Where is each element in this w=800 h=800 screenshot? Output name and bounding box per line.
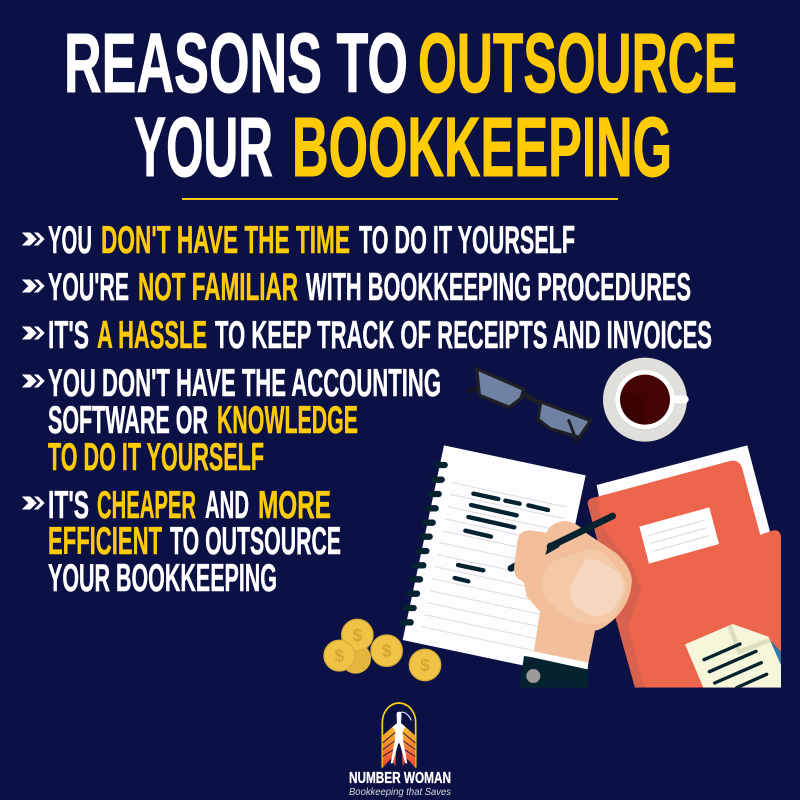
reason 4: TO DO IT YOURSELF [48,436,264,479]
panel: red folder [588,445,781,688]
reason 2: NOT FAMILIAR [138,266,298,309]
reason 3: A HASSLE [97,314,207,357]
reason 4 [23,362,441,479]
title: YOUR [134,100,273,194]
reason 3: IT'S [48,314,89,357]
reason 1: YOU [48,219,92,262]
reason 5: TO OUTSOURCE [170,520,341,563]
icon: gold coins [324,619,441,681]
panel: spiral notebook [403,445,586,670]
reason 4: YOU DON'T HAVE THE ACCOUNTING [48,362,441,405]
reason 5 [23,484,341,600]
reason 5: IT'S [48,484,89,527]
title: REASONS TO [64,16,408,110]
reason 4: KNOWLEDGE [217,399,358,442]
reason 5: CHEAPER [97,484,196,527]
folder label [639,507,719,564]
reason 2 [23,266,691,309]
reason 5: YOUR BOOKKEEPING [48,557,277,600]
icon: hand holding pen [511,516,632,688]
reason 1: TO DO IT YOURSELF [359,219,575,262]
shirt cuff [519,656,588,688]
reasons list [23,219,712,600]
logo tagline: Bookkeeping that Saves [349,786,452,798]
logo emblem [382,703,416,768]
handwritten lines [455,494,548,581]
paper note [685,624,781,688]
logo name: NUMBER WOMAN [349,770,451,787]
reason 4: SOFTWARE OR [48,399,208,442]
reason 2: YOU'RE [48,266,129,309]
reason 3 [23,314,712,357]
icon: gold coins: $ [382,641,392,661]
reason 5: MORE [258,484,331,527]
reason 5: AND [205,484,249,527]
reason 1: DON'T HAVE THE TIME [101,219,350,262]
logo: Number Woman [349,703,452,798]
icon: gold coins: $ [420,655,430,675]
reason 5: EFFICIENT [48,520,162,563]
icon: gold coins: $ [335,646,345,666]
title [64,16,737,194]
icon: coffee cup [603,358,689,442]
icon: glasses [469,369,591,443]
illustration: desk with notebook, folder and hand [324,358,781,688]
notebook spiral binding [403,465,445,622]
icon: gold coins: $ [353,625,363,645]
